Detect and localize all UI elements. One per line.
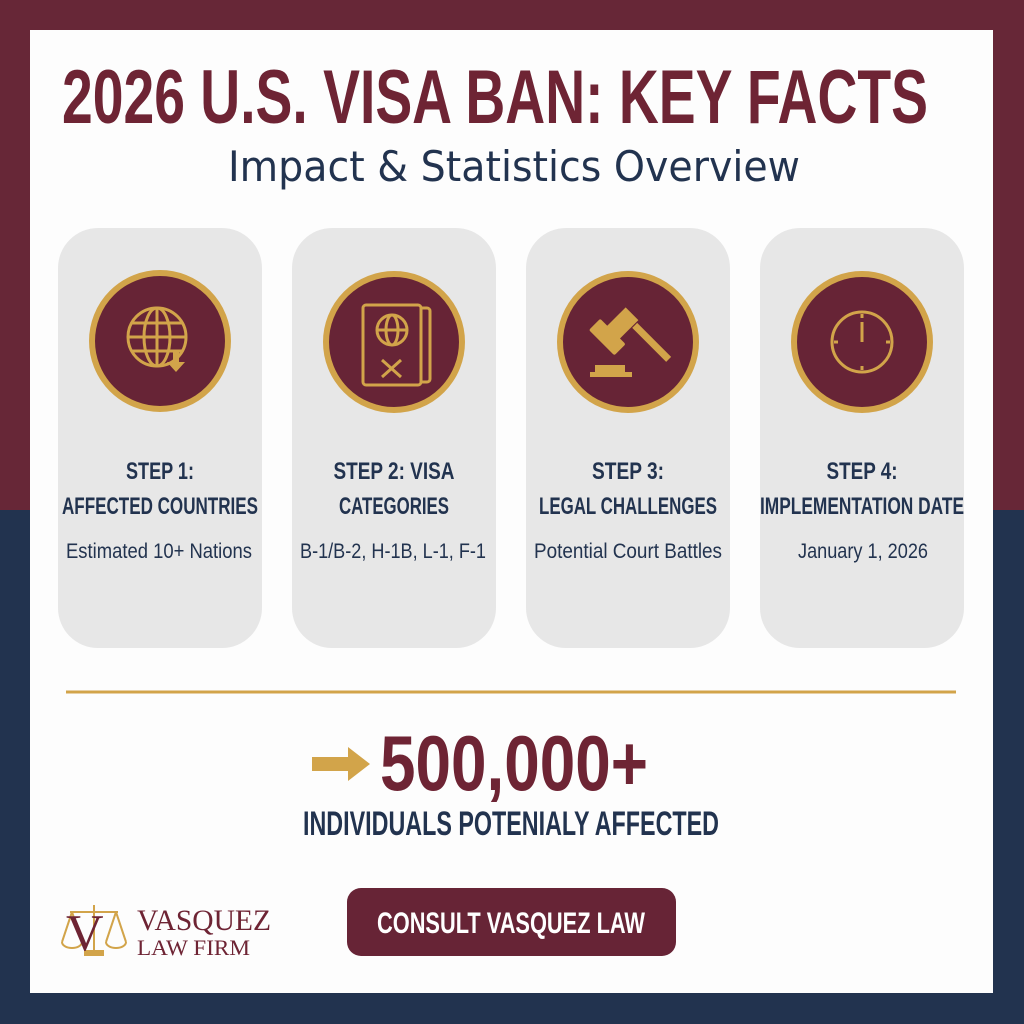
- panel: step 3: LEGAL CHALLENGES: [539, 493, 717, 520]
- button: [347, 888, 676, 956]
- caption: INDIVIDUALS POTENIALY AFFECTED: [303, 805, 719, 843]
- panel: step 1: AFFECTED COUNTRIES: [62, 493, 258, 520]
- panel: step 1: Estimated 10+ Nations: [66, 540, 252, 563]
- button: CONSULT VASQUEZ LAW: [377, 907, 645, 940]
- panel: step 1: [58, 228, 262, 648]
- panel: step 4: January 1, 2026: [798, 540, 928, 563]
- panel: step 2: STEP 2: VISA: [334, 458, 454, 485]
- logo: VASQUEZ: [137, 904, 271, 937]
- panel: step 3: Potential Court Battles: [534, 540, 722, 563]
- icon: passport: [326, 274, 462, 410]
- panel: step 3: STEP 3:: [592, 458, 664, 485]
- subtitle: Impact & Statistics Overview: [228, 142, 800, 191]
- icon: gavel: [560, 274, 696, 410]
- panel: step 3: [526, 228, 730, 648]
- icon: globe: [92, 273, 228, 409]
- arrow: [312, 747, 370, 781]
- panel: step 2: CATEGORIES: [339, 493, 449, 520]
- panel: step 2: [292, 228, 496, 648]
- panel: step 1: STEP 1:: [126, 458, 194, 485]
- logo: LAW FIRM: [137, 935, 250, 960]
- panel: step 2: B-1/B-2, H-1B, L-1, F-1: [300, 540, 486, 563]
- panel: step 4: [760, 228, 964, 648]
- logo: V: [66, 905, 104, 962]
- icon: clock: [794, 274, 930, 410]
- logo: [62, 904, 271, 962]
- big number: 500,000+: [380, 719, 648, 807]
- panel: step 4: STEP 4:: [826, 458, 898, 485]
